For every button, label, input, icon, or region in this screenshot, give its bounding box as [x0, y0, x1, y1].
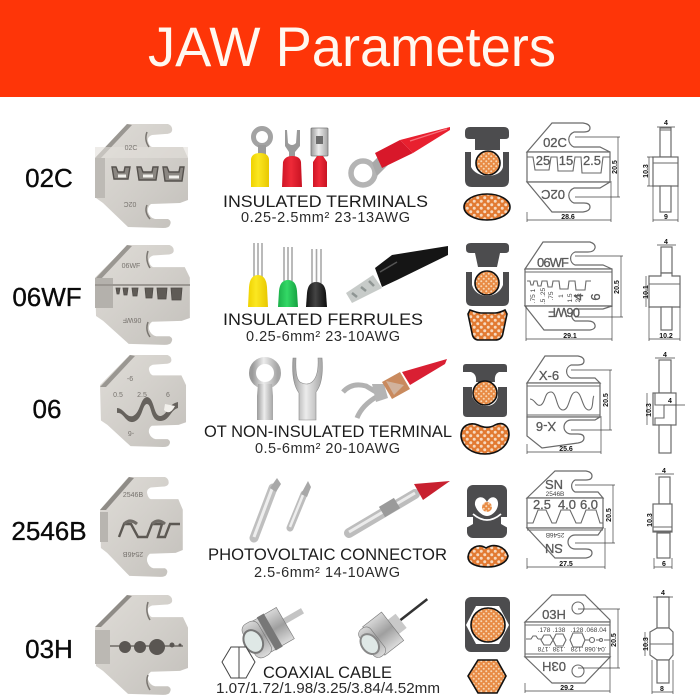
diagram: 06WF die dimensions: 1 — [558, 294, 565, 298]
diagram: 06WF die dimensions: .5 .25 — [540, 287, 547, 304]
diagram: 2546B die dimensions: SN — [545, 477, 563, 492]
diagram: 02C die dimensions: 2.5 — [583, 153, 601, 168]
text: coaxial cable: COAXIAL CABLE — [263, 663, 392, 682]
icon: 2546B jaw die: 2546B — [123, 492, 143, 499]
diagram: 2546B side view — [647, 468, 674, 569]
diagram: 03H die dimensions: 20.5 — [611, 633, 618, 647]
icon: BNC connector left — [236, 596, 313, 662]
diagram: 06 die dimensions: 25.6 — [559, 446, 573, 453]
panel: 2546B row — [11, 468, 674, 581]
diagram: 02C die dimensions: 02C — [543, 135, 567, 150]
icon: 2546B jaw die: 2546B — [123, 550, 143, 557]
diagram: 06 die dimensions — [527, 356, 612, 454]
diagram: 03H die dimensions — [525, 595, 620, 693]
icon: photovoltaic connector pins — [254, 478, 311, 538]
text: photovoltaic connector: PHOTOVOLTAIC CONNECTOR — [208, 545, 447, 564]
diagram: 06WF die dimensions: 29.1 — [563, 333, 577, 340]
diagram: 02C side view: 4 — [664, 120, 668, 127]
diagram: 03H die dimensions: .138 — [552, 645, 565, 652]
diagram: 06WF side view — [643, 239, 680, 341]
diagram: 02C side view: 9 — [664, 214, 668, 221]
diagram: 06 side view — [646, 352, 685, 453]
icon: 06 crimp cross-section — [461, 364, 509, 454]
diagram: 03H die dimensions: .128 — [570, 645, 583, 652]
diagram: 02C side view — [643, 120, 678, 222]
diagram: 03H die dimensions: 03H — [542, 659, 566, 674]
icon: non-insulated terminals — [252, 358, 447, 420]
diagram: 2546B die dimensions: 2546B — [546, 531, 564, 538]
diagram: 03H side view: 4 — [661, 590, 665, 597]
icon: 02C crimp cross-section — [464, 127, 510, 220]
diagram: 03H die dimensions: .068 — [585, 627, 598, 634]
diagram: 06 side view: 10.3 — [646, 403, 653, 417]
title: JAW Parameters — [148, 15, 556, 78]
heading: 06WF: 06WF — [12, 282, 82, 312]
panel: 03H row — [25, 585, 673, 697]
text: insulated ferrules range: 0.25-6mm² 23-10AWG — [246, 329, 400, 345]
diagram: 02C die dimensions: 15 — [559, 153, 573, 168]
text: insulated ferrules: INSULATED FERRULES — [223, 310, 423, 329]
diagram: 03H side view: 10.3 — [643, 637, 650, 651]
diagram: 06WF die dimensions: 2.5 — [575, 293, 582, 303]
icon: 03H crimp cross-section — [465, 597, 510, 693]
diagram: 06 die dimensions: 20.5 — [603, 393, 610, 407]
icon: 06 jaw die: -6 — [127, 376, 133, 383]
diagram: 06WF die dimensions — [525, 242, 623, 341]
heading: 2546B: 2546B — [11, 516, 87, 546]
diagram: 06WF die dimensions: 06WF — [537, 255, 569, 270]
diagram: 06WF die dimensions: 4 — [571, 293, 586, 301]
icon: insulated ferrules — [248, 243, 448, 307]
diagram: 06WF side view: 10.2 — [659, 333, 673, 340]
diagram: 03H die dimensions: .128 — [571, 627, 584, 634]
icon: 06 jaw die: 6 — [166, 392, 170, 399]
icon: 02C jaw die: 02C — [124, 200, 136, 207]
diagram: 2546B die dimensions: SN — [545, 541, 563, 556]
diagram: 03H side view: 8 — [660, 686, 664, 693]
icon: 06 jaw die: -6 — [128, 429, 134, 436]
icon: 06WF jaw die — [95, 245, 190, 345]
panel: 06 row — [33, 352, 685, 457]
icon: 06WF crimp cross-section — [466, 243, 509, 340]
diagram: 03H die dimensions: 29.2 — [560, 685, 574, 692]
diagram: 06 die dimensions: X-6 — [539, 368, 559, 383]
diagram: 03H die dimensions: .138 — [553, 627, 566, 634]
diagram: 03H die dimensions: .178 — [537, 645, 550, 652]
diagram: 06WF side view: 10.1 — [643, 285, 650, 299]
diagram: 06 side view: 4 — [668, 398, 672, 405]
diagram: 06WF die dimensions: 6 — [588, 293, 603, 301]
diagram: 02C die dimensions: 02C — [541, 187, 565, 202]
diagram: 2546B die dimensions: 20.5 — [606, 508, 613, 522]
diagram: 03H die dimensions: .068 — [584, 645, 597, 652]
diagram: 03H die dimensions: 03H — [542, 607, 566, 622]
icon: BNC connector with cable — [352, 585, 438, 663]
diagram: 03H side view — [643, 590, 673, 694]
diagram: 03H die dimensions: .04 — [597, 627, 607, 634]
text: non-insulated terminal range: 0.5-6mm² 20-10AWG — [255, 441, 400, 457]
text: insulated terminals range: 0.25-2.5mm² 23-13AWG — [241, 210, 410, 226]
diagram: 06WF die dimensions: .75 1 — [530, 288, 537, 303]
heading: 02C: 02C — [25, 163, 73, 193]
icon: 02C jaw die — [95, 124, 188, 228]
diagram: 06WF die dimensions: 1.5 — [567, 293, 574, 303]
icon: 06WF jaw die: 06WF — [123, 316, 141, 323]
header banner — [0, 0, 700, 97]
diagram: 02C die dimensions — [527, 123, 620, 222]
diagram: 2546B die dimensions: 4.0 — [558, 497, 576, 512]
diagram: 03H die dimensions: .178 — [538, 627, 551, 634]
diagram: 06WF die dimensions: 20.5 — [614, 280, 621, 294]
panel: 06WF row — [12, 239, 680, 345]
icon: 06 jaw die: 0.5 — [113, 392, 123, 399]
heading: 06: 06 — [33, 394, 61, 424]
heading: 03H: 03H — [25, 634, 73, 664]
diagram: 02C side view: 10.3 — [643, 164, 650, 178]
diagram: 02C die dimensions: 25 — [536, 153, 550, 168]
icon: 06WF jaw die: 06WF — [122, 263, 140, 270]
diagram: 06 side view: 4 — [663, 352, 667, 359]
diagram: 06WF die dimensions: 06WF — [548, 305, 580, 320]
text: coaxial cable sizes: 1.07/1.72/1.98/3.25/3.84/4.52mm — [216, 681, 440, 697]
diagram: 2546B side view: 6 — [662, 561, 666, 568]
diagram: 2546B die dimensions: 27.5 — [559, 561, 573, 568]
icon: 06 jaw die: 2.5 — [137, 392, 147, 399]
diagram: 02C die dimensions: 28.6 — [561, 214, 575, 221]
diagram: 2546B die dimensions: 2546B — [546, 491, 564, 498]
icon: 06 jaw die — [100, 355, 186, 447]
icon: hexagon crimp profile — [222, 647, 255, 678]
text: non-insulated terminal: OT NON-INSULATED TERMINAL — [204, 422, 452, 441]
icon: 02C jaw die: 02C — [125, 145, 137, 152]
diagram: 02C die dimensions: 20.5 — [612, 160, 619, 174]
diagram: 06WF die dimensions: .75 — [548, 291, 555, 301]
icon: 2546B jaw die — [100, 477, 183, 577]
icon: 03H jaw die — [95, 595, 188, 695]
diagram: 2546B side view: 4 — [662, 468, 666, 475]
diagram: 06 die dimensions: X-6 — [536, 419, 556, 434]
diagram: 2546B die dimensions — [527, 471, 615, 569]
text: photovoltaic connector range: 2.5-6mm² 14-10AWG — [254, 565, 400, 581]
diagram: 06WF side view: 4 — [664, 239, 668, 246]
icon: 2546B crimp cross-section — [466, 485, 508, 567]
icon: photovoltaic connector with cable — [349, 481, 450, 533]
icon: insulated terminals — [251, 127, 450, 187]
diagram: 2546B side view: 10.3 — [647, 513, 654, 527]
text: insulated terminals: INSULATED TERMINALS — [223, 192, 428, 211]
panel: 02C row — [25, 120, 678, 228]
diagram: 2546B die dimensions: 6.0 — [580, 497, 598, 512]
diagram: 03H die dimensions: .04 — [597, 645, 607, 652]
diagram: 2546B die dimensions: 2.5 — [533, 497, 551, 512]
